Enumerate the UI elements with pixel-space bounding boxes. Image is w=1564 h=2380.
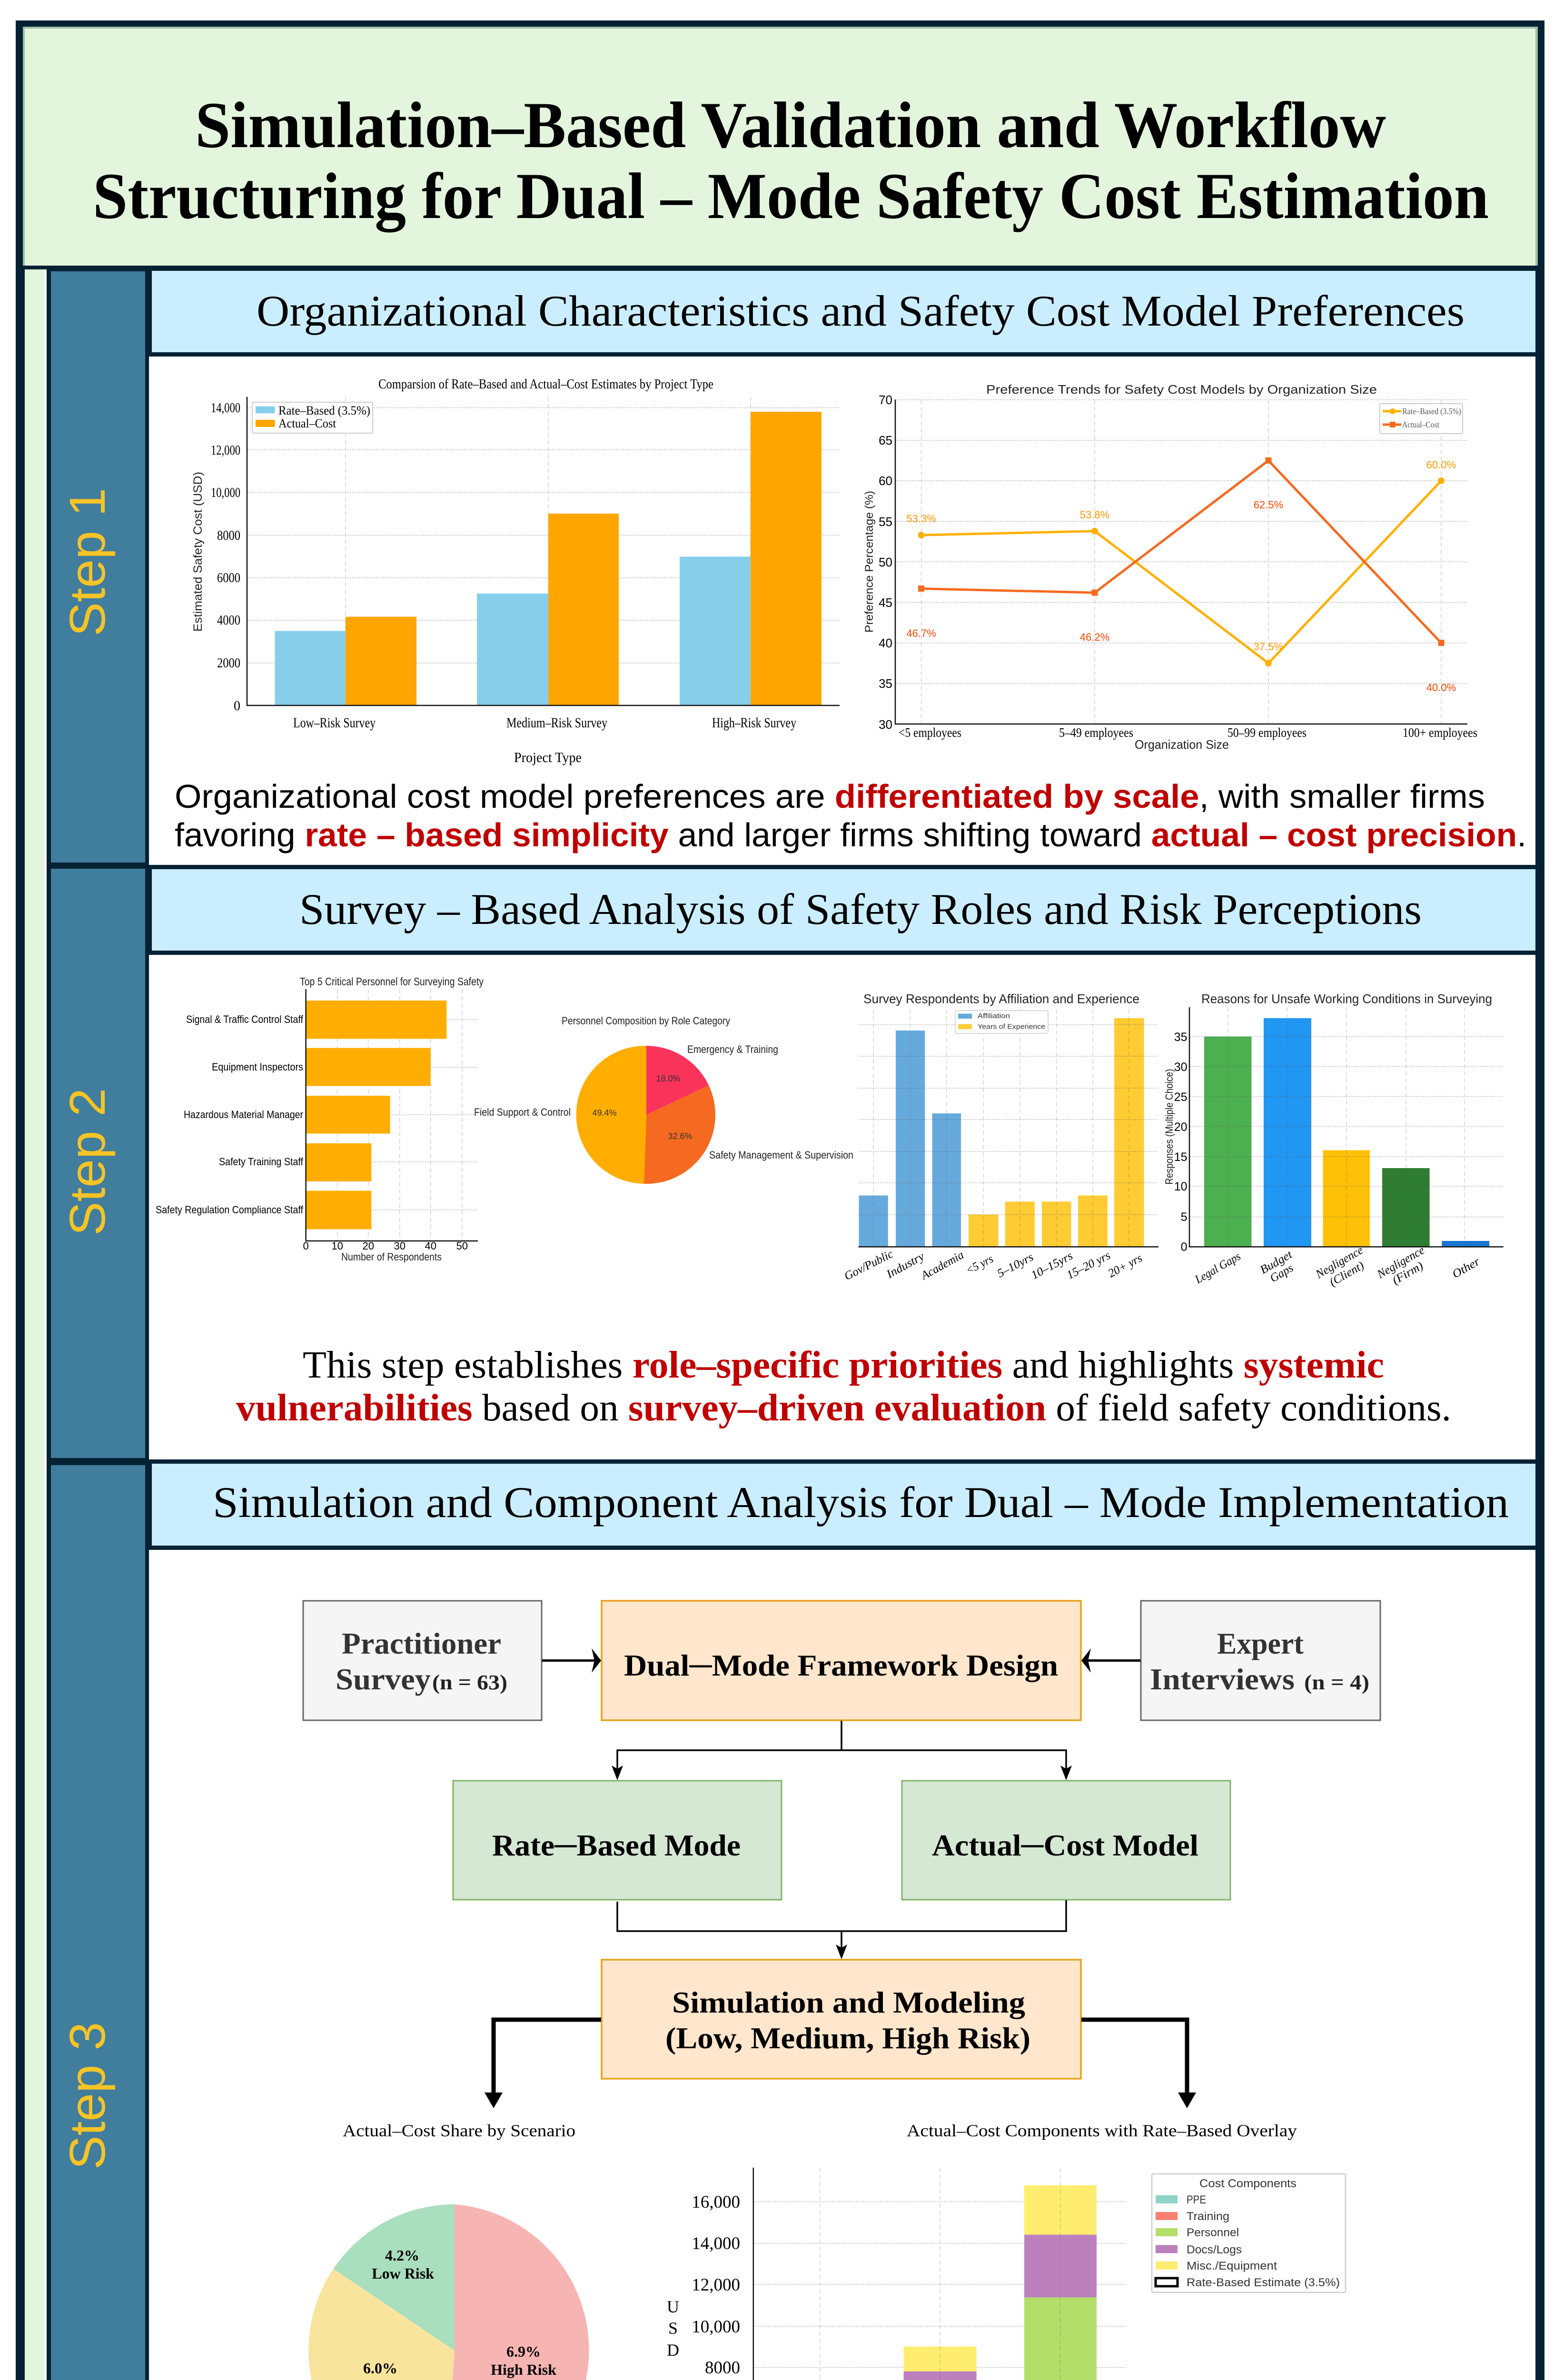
- x axis ticks: 50: [456, 1240, 468, 1252]
- legend: [1152, 2174, 1346, 2292]
- legend: Actual–Cost: [1402, 420, 1439, 429]
- actual-cost data labels: [906, 499, 1456, 694]
- title text: Structuring for Dual – Mode Safety Cost Estimation: [93, 159, 1489, 232]
- y axis label: Responses (Multiple Choice): [1163, 1069, 1175, 1184]
- x axis ticks: 40: [425, 1240, 436, 1252]
- y axis label: Preference Percentage (%): [863, 491, 876, 633]
- y axis ticks: 10: [1174, 1180, 1187, 1193]
- x axis title: Number of Respondents: [341, 1251, 442, 1263]
- title text: [93, 89, 1489, 232]
- y axis ticks: 30: [1174, 1061, 1187, 1074]
- x axis labels: [899, 725, 1477, 740]
- flow box: dual-mode framework design: [602, 1601, 1081, 1720]
- category labels: Safety Training Staff: [219, 1156, 304, 1168]
- panel: step 2 content: [149, 865, 1535, 1459]
- x axis labels: [293, 715, 796, 765]
- y axis ticks: 50: [879, 555, 892, 569]
- x axis ticks: 20: [362, 1240, 374, 1252]
- legend: Personnel: [1187, 2226, 1239, 2239]
- chart title: Comparsion of Rate–Based and Actual–Cost Estimates by Project Type: [378, 377, 713, 392]
- flow box: practitioner survey: [303, 1601, 542, 1720]
- x axis labels: [842, 1248, 1145, 1283]
- y axis label: Estimated Safety Cost (USD): [191, 472, 205, 632]
- flow box: expert interviews: Interviews: [1150, 1662, 1295, 1696]
- x axis ticks: 0: [303, 1240, 309, 1252]
- arrow: framework splits to modes: [612, 1721, 1072, 1780]
- chart title: Top 5 Critical Personnel for Surveying Safety: [300, 975, 484, 988]
- flow box: actual-cost model: [902, 1781, 1230, 1900]
- y axis ticks: 10,000: [211, 486, 240, 500]
- step 3 label: Step 3: [59, 2022, 116, 2170]
- heading: step 2: Survey – Based Analysis of Safety Roles and Risk Perceptions: [299, 885, 1422, 933]
- rate-based data labels: 53.8%: [1080, 509, 1109, 521]
- slice labels: Field Support & Control: [474, 1106, 571, 1118]
- step column: step 3: [51, 1465, 145, 2380]
- x axis labels: Negligence: [1375, 1244, 1427, 1281]
- y axis ticks: 40: [879, 636, 892, 650]
- chart title: Actual–Cost Components with Rate–Based Overlay: [907, 2121, 1297, 2140]
- bar chart: rate vs actual cost: [191, 377, 840, 765]
- flow box: practitioner survey: Survey: [336, 1662, 431, 1696]
- category labels: Safety Regulation Compliance Staff: [156, 1204, 304, 1216]
- flow box: expert interviews: (n = 4): [1304, 1671, 1369, 1694]
- slice percentages: 18.0%: [656, 1074, 681, 1083]
- x axis labels: Low–Risk Survey: [293, 715, 376, 731]
- step 2 label: Step 2: [59, 1088, 116, 1236]
- x axis labels: High–Risk Survey: [712, 715, 796, 731]
- stacked bars: [783, 2185, 1097, 2380]
- y axis ticks: 15: [1174, 1150, 1187, 1164]
- y axis label: S: [668, 2319, 678, 2338]
- x axis labels: 10–15yrs: [1029, 1250, 1075, 1282]
- slice: high risk: High Risk: [491, 2361, 556, 2378]
- x axis labels: Industry: [884, 1250, 927, 1281]
- y axis ticks: 65: [879, 433, 892, 447]
- flow box: simulation and modeling: (Low, Medium, High Risk): [665, 2021, 1030, 2055]
- slice: high risk: 6.9%: [506, 2343, 541, 2360]
- panel: step 3 content: [149, 1459, 1535, 2380]
- legend: Actual–Cost: [278, 416, 337, 430]
- y axis ticks: 55: [879, 515, 892, 529]
- flow box: rate-based mode: Rate─Based Mode: [492, 1828, 741, 1862]
- x axis labels: 5–10yrs: [995, 1250, 1036, 1280]
- x axis labels: Negligence: [1313, 1244, 1366, 1281]
- chart title: Reasons for Unsafe Working Conditions in Surveying: [1201, 992, 1492, 1006]
- slice: high risk: [445, 2204, 589, 2380]
- takeaway text: step 1: [175, 778, 1526, 853]
- y axis ticks: 12,000: [692, 2275, 740, 2295]
- y axis ticks: 5: [1181, 1210, 1187, 1224]
- pie title: Personnel Composition by Role Category: [562, 1015, 730, 1027]
- slice: medium risk: [308, 2269, 455, 2380]
- slice: low risk: Low Risk: [372, 2265, 434, 2282]
- chart title: Survey Respondents by Affiliation and Experience: [863, 992, 1139, 1006]
- y axis ticks: 70: [879, 393, 892, 407]
- legend: Rate-Based Estimate (3.5%): [1187, 2276, 1340, 2289]
- y axis ticks: 25: [1174, 1091, 1187, 1104]
- slice labels: Safety Management & Supervision: [709, 1149, 853, 1161]
- y axis ticks: 16,000: [692, 2192, 740, 2212]
- rate-based data labels: 53.3%: [906, 513, 936, 525]
- legend: Cost Components: [1199, 2177, 1297, 2190]
- x axis labels: Academia: [918, 1249, 966, 1283]
- legend: Docs/Logs: [1187, 2243, 1242, 2256]
- takeaway text: step 2: vulnerabilities based on survey–driven evaluation of field safety conditions.: [236, 1387, 1451, 1429]
- y axis ticks: [692, 2192, 740, 2380]
- rate-based data labels: 60.0%: [1426, 459, 1456, 471]
- x axis labels: 20+ yrs: [1106, 1251, 1145, 1280]
- category labels: [156, 1013, 304, 1216]
- heading: step 1: Organizational Characteristics and Safety Cost Model Preferences: [257, 287, 1465, 335]
- slice percentages: [592, 1074, 693, 1141]
- category labels: Hazardous Material Manager: [184, 1109, 303, 1121]
- category labels: Equipment Inspectors: [212, 1061, 303, 1073]
- flow box: simulation and modeling: [602, 1960, 1081, 2079]
- x axis labels: Medium–Risk Survey: [506, 715, 607, 731]
- legend: [955, 1011, 1048, 1033]
- slice percentages: 32.6%: [668, 1131, 693, 1141]
- y axis ticks: 60: [879, 474, 892, 488]
- line chart: preference trends: [863, 382, 1477, 752]
- rate-based data labels: 37.5%: [1254, 641, 1283, 653]
- flow box: expert interviews: Expert: [1217, 1626, 1304, 1660]
- slice: low risk: [333, 2204, 455, 2350]
- y axis ticks: 30: [879, 717, 892, 732]
- legend: [1380, 404, 1463, 434]
- arrow: survey to framework: [542, 1648, 601, 1673]
- stacked bar chart: actual-cost components with rate-based overlay: [667, 2121, 1346, 2380]
- step column: step 1: [47, 270, 149, 2380]
- legend: Rate–Based (3.5%): [1402, 407, 1461, 416]
- y axis ticks: 14,000: [692, 2234, 740, 2253]
- x axis ticks: 10: [331, 1240, 343, 1252]
- step 1 label: Step 1: [59, 488, 116, 636]
- y axis ticks: 8000: [705, 2358, 740, 2378]
- slice percentages: 49.4%: [592, 1108, 617, 1118]
- chart title: Actual–Cost Share by Scenario: [343, 2121, 575, 2140]
- x axis labels: Gaps: [1268, 1261, 1296, 1285]
- x axis labels: Project Type: [514, 750, 582, 765]
- x axis labels: (Firm): [1390, 1259, 1425, 1287]
- takeaway text: step 2: [236, 1344, 1451, 1429]
- title text: Simulation–Based Validation and Workflow: [195, 89, 1386, 161]
- x axis labels: Other: [1450, 1255, 1482, 1281]
- legend: [252, 402, 373, 433]
- rate-based data labels: [906, 459, 1456, 653]
- takeaway text: step 2: This step establishes role–specific priorities and highlights systemic: [303, 1344, 1384, 1386]
- slice labels: [474, 1043, 853, 1161]
- heading: step 3: Simulation and Component Analysis for Dual – Mode Implementation: [213, 1478, 1509, 1527]
- x axis title: Organization Size: [1135, 737, 1229, 752]
- x axis labels: Legal Gaps: [1192, 1250, 1243, 1287]
- legend: Rate–Based (3.5%): [278, 404, 370, 417]
- legend: Years of Experience: [978, 1023, 1045, 1031]
- x axis labels: Budget: [1258, 1248, 1295, 1277]
- panel: step 1 content: [149, 270, 1535, 865]
- title banner: [23, 27, 1538, 266]
- x axis labels: <5 yrs: [964, 1252, 996, 1277]
- actual-cost data labels: 62.5%: [1254, 499, 1283, 511]
- y axis ticks: 8000: [217, 528, 240, 543]
- actual-cost data labels: 40.0%: [1426, 682, 1456, 694]
- actual-cost data labels: 46.2%: [1080, 631, 1109, 643]
- x axis labels: 100+ employees: [1403, 725, 1477, 740]
- y axis ticks: 12,000: [211, 443, 240, 458]
- arrow: interviews to framework: [1081, 1648, 1140, 1673]
- y axis ticks: 14,000: [211, 401, 240, 416]
- bar chart: respondents by affiliation and experience: [842, 992, 1158, 1283]
- flow box: simulation and modeling: Simulation and Modeling: [672, 1985, 1025, 2019]
- pie chart: personnel composition: [474, 1015, 853, 1184]
- slice: low risk: 4.2%: [385, 2247, 419, 2264]
- horizontal bar chart: critical personnel: [156, 975, 484, 1263]
- flow box: actual-cost model: Actual─Cost Model: [932, 1828, 1198, 1862]
- flow box: practitioner survey: Practitioner: [342, 1626, 501, 1660]
- legend: Affiliation: [978, 1012, 1010, 1020]
- y axis ticks: 10,000: [692, 2317, 740, 2337]
- step column: step 2: [51, 869, 145, 1458]
- y axis ticks: 35: [1174, 1031, 1187, 1044]
- x axis ticks: 30: [394, 1240, 406, 1252]
- y axis label: U: [667, 2297, 679, 2316]
- arrow: simulation to pie chart: [485, 2020, 601, 2108]
- actual-cost data labels: 46.7%: [906, 627, 936, 639]
- y axis ticks: [211, 401, 240, 714]
- x axis labels: 5–49 employees: [1059, 725, 1133, 740]
- arrow: simulation to stacked chart: [1081, 2020, 1196, 2108]
- y axis ticks: 20: [1174, 1121, 1187, 1134]
- bar chart: reasons for unsafe conditions: [1163, 992, 1504, 1289]
- y axis ticks: 0: [1181, 1240, 1187, 1254]
- takeaway text: step 1: Organizational cost model preferences are differentiated by scale , with smaller firms: [175, 778, 1485, 815]
- x axis ticks: [303, 1240, 468, 1252]
- y axis ticks: 35: [879, 676, 892, 691]
- flow box: expert interviews: [1141, 1601, 1380, 1720]
- pie chart: actual-cost share by scenario: [308, 2121, 589, 2380]
- category labels: Signal & Traffic Control Staff: [186, 1013, 304, 1025]
- x axis labels: (Client): [1327, 1259, 1366, 1289]
- legend: Training: [1187, 2210, 1229, 2223]
- legend: Misc./Equipment: [1187, 2260, 1277, 2272]
- legend: PPE: [1187, 2193, 1206, 2206]
- flow box: practitioner survey: (n = 63): [432, 1671, 507, 1694]
- x axis labels: Gov/Public: [842, 1248, 895, 1283]
- y axis label: [667, 2297, 679, 2360]
- y axis ticks: [879, 393, 892, 732]
- slice: medium risk: 6.0%: [363, 2360, 397, 2377]
- x axis labels: 15–20 yrs: [1065, 1249, 1112, 1282]
- flow box: dual-mode framework design: Dual─Mode Framework Design: [624, 1648, 1058, 1682]
- flow box: rate-based mode: [453, 1781, 782, 1900]
- y axis ticks: 2000: [217, 656, 240, 671]
- x axis labels: <5 employees: [899, 725, 961, 740]
- y axis ticks: 4000: [217, 613, 240, 628]
- x axis labels: 50–99 employees: [1227, 725, 1307, 740]
- arrow: modes merge to simulation: [617, 1900, 1066, 1959]
- y axis ticks: 0: [234, 699, 240, 714]
- x axis labels: [1192, 1244, 1482, 1289]
- chart title: Preference Trends for Safety Cost Models by Organization Size: [986, 382, 1377, 397]
- y axis ticks: 6000: [217, 571, 240, 585]
- y axis label: D: [667, 2340, 679, 2360]
- y axis ticks: [1174, 1031, 1187, 1254]
- y axis ticks: 45: [879, 595, 892, 610]
- slice labels: Emergency & Training: [687, 1043, 778, 1055]
- takeaway text: step 1: favoring rate – based simplicity and larger firms shifting toward actual – cost precision.: [175, 816, 1526, 853]
